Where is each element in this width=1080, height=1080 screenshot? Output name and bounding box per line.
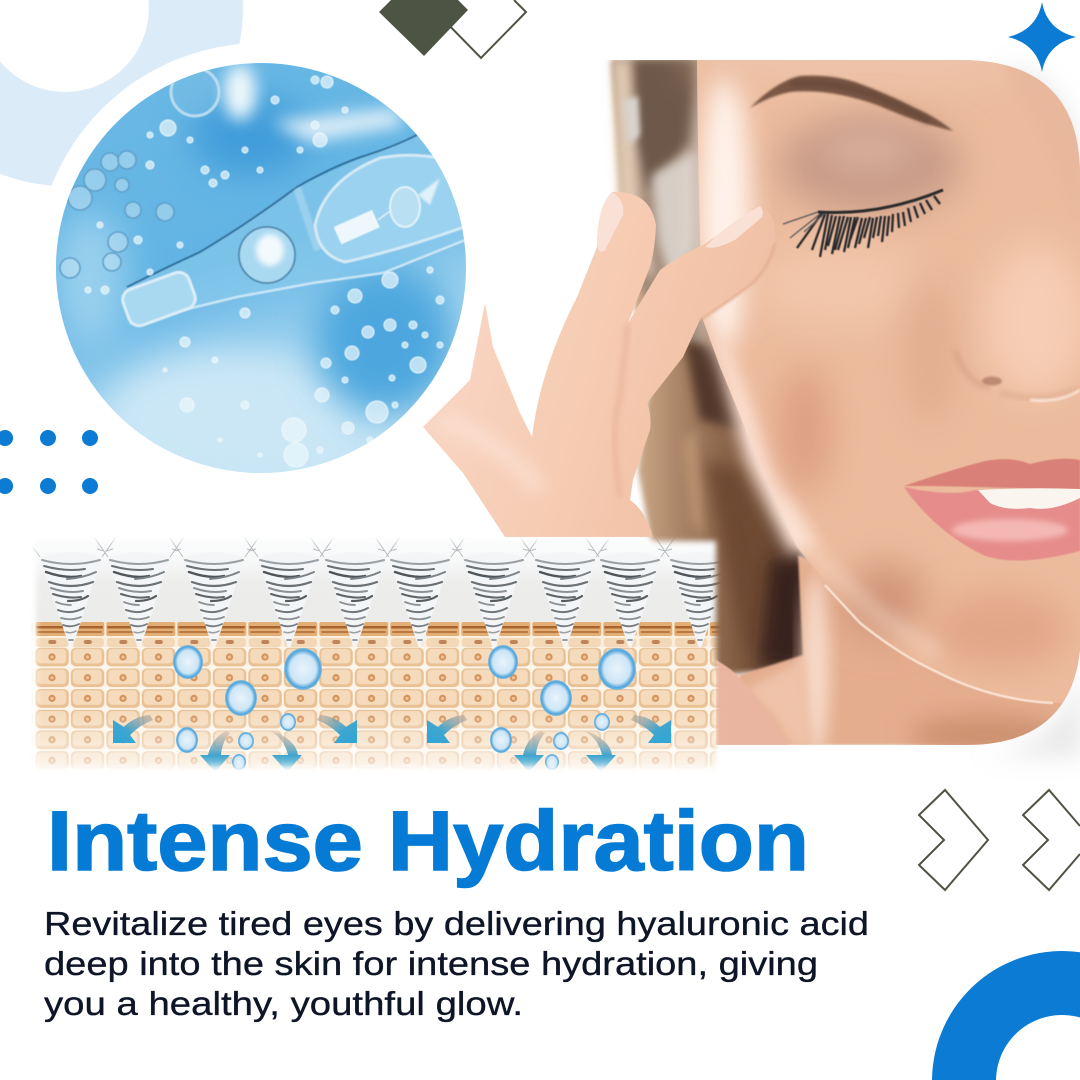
small pale bubbles xyxy=(85,76,444,467)
hair xyxy=(612,60,805,675)
body text: you a healthy, youthful glow. xyxy=(44,985,523,1022)
bubbles xyxy=(60,68,444,467)
hand with fingers xyxy=(423,192,775,537)
serum circle photo xyxy=(54,63,470,490)
body text: Revitalize tired eyes by delivering hyaluronic acid xyxy=(44,905,869,942)
white ring behind serum circle xyxy=(36,43,486,493)
jaw line highlight xyxy=(807,540,1054,704)
decoration: outlined diamond xyxy=(436,0,526,58)
photo panel: woman touching eye xyxy=(612,38,1080,757)
nose xyxy=(955,350,1080,401)
body text xyxy=(44,905,869,1022)
chevron icon 1 xyxy=(919,790,988,890)
decoration: blue ring bottom-right xyxy=(932,951,1080,1080)
eyebrow xyxy=(750,76,953,131)
large rimmed bubbles xyxy=(60,68,219,278)
face shape xyxy=(697,60,1080,703)
chevron icon 2 xyxy=(1023,790,1080,890)
face highlights and shadows xyxy=(690,38,1080,668)
diagram background xyxy=(35,536,720,622)
closed eye and lashes xyxy=(783,190,943,257)
skin diagram: serum penetrating skin layers xyxy=(26,530,745,775)
serum tones xyxy=(54,64,455,490)
neck xyxy=(715,555,1080,745)
lips xyxy=(904,459,1080,560)
hyaluronic droplets xyxy=(173,645,636,770)
diffusion arrows xyxy=(113,715,671,772)
dropper xyxy=(120,135,470,329)
skin cells xyxy=(30,622,730,775)
body text: deep into the skin for intense hydration, giving xyxy=(44,945,818,982)
nail: middle finger xyxy=(597,192,623,252)
title: Intense Hydration xyxy=(47,794,809,888)
decoration: light blue ring top-left xyxy=(0,0,243,186)
decoration: blue dot grid xyxy=(0,430,98,494)
finger crease shadows xyxy=(440,243,775,497)
nail: index finger xyxy=(705,206,763,248)
serum cones xyxy=(26,537,745,647)
decoration: solid olive diamond xyxy=(379,0,468,56)
neck shading xyxy=(716,575,1060,755)
panel soft shadow xyxy=(1018,68,1080,761)
decoration: blue four-point star xyxy=(1008,2,1076,72)
